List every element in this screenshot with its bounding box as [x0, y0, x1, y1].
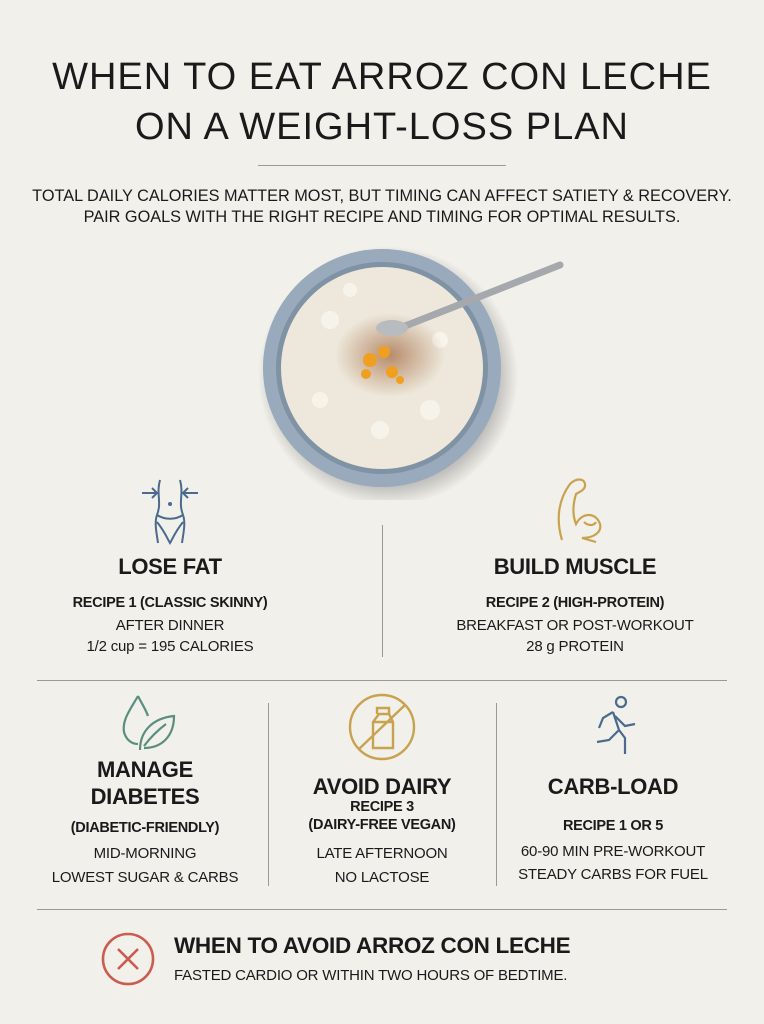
panel: manage diabetes: MANAGE: [97, 757, 193, 782]
panel: avoid dairy: (DAIRY-FREE VEGAN): [308, 817, 456, 833]
subtitle: [32, 187, 732, 226]
title: ON A WEIGHT-LOSS PLAN: [135, 106, 629, 148]
panel: lose fat: LOSE FAT: [118, 554, 222, 579]
panel: carb-load: 60-90 MIN PRE-WORKOUT: [521, 843, 705, 860]
panel: avoid dairy: AVOID DAIRY: [313, 774, 451, 799]
panel: lose fat: 1/2 cup = 195 CALORIES: [87, 638, 253, 655]
panel: lose fat: [73, 480, 267, 655]
panel: carb-load: RECIPE 1 OR 5: [563, 818, 663, 834]
callout: when to avoid: FASTED CARDIO OR WITHIN TWO HOURS OF BEDTIME.: [174, 967, 567, 984]
panel: carb-load: STEADY CARBS FOR FUEL: [518, 866, 708, 883]
panel: avoid dairy: [308, 694, 456, 886]
panel: build muscle: BREAKFAST OR POST-WORKOUT: [456, 617, 694, 634]
panel: avoid dairy: NO LACTOSE: [335, 869, 429, 886]
icon: drop and leaf: [122, 696, 176, 750]
panel: lose fat: AFTER DINNER: [116, 617, 224, 634]
callout: when to avoid: [102, 932, 570, 986]
panel: manage diabetes: LOWEST SUGAR & CARBS: [52, 869, 238, 886]
panel: build muscle: 28 g PROTEIN: [526, 638, 624, 655]
panel: manage diabetes: MID-MORNING: [94, 845, 196, 862]
panel: build muscle: [456, 478, 694, 655]
icon: flexed arm: [558, 478, 602, 543]
icon: waist: [142, 480, 198, 545]
panel: build muscle: BUILD MUSCLE: [494, 554, 656, 579]
panel: manage diabetes: [52, 696, 238, 886]
panel: avoid dairy: LATE AFTERNOON: [316, 845, 448, 862]
icon: no milk carton: [348, 694, 416, 760]
subtitle: PAIR GOALS WITH THE RIGHT RECIPE AND TIMING FOR OPTIMAL RESULTS.: [84, 208, 680, 226]
title: [52, 56, 712, 148]
panel: lose fat: RECIPE 1 (CLASSIC SKINNY): [73, 595, 267, 611]
panel: manage diabetes: (DIABETIC-FRIENDLY): [71, 820, 219, 836]
callout: when to avoid: WHEN TO AVOID ARROZ CON LECHE: [174, 933, 570, 958]
panel: carb-load: [518, 696, 708, 883]
illustration: bowl of rice pudding: [262, 249, 564, 500]
title: WHEN TO EAT ARROZ CON LECHE: [52, 56, 712, 98]
panel: build muscle: RECIPE 2 (HIGH-PROTEIN): [486, 595, 664, 611]
icon: red x: [102, 932, 154, 986]
panel: manage diabetes: DIABETES: [91, 784, 199, 809]
panel: avoid dairy: RECIPE 3: [350, 799, 414, 815]
subtitle: TOTAL DAILY CALORIES MATTER MOST, BUT TIMING CAN AFFECT SATIETY & RECOVERY.: [32, 187, 732, 205]
icon: runner: [596, 696, 636, 754]
panel: carb-load: CARB-LOAD: [548, 774, 678, 799]
